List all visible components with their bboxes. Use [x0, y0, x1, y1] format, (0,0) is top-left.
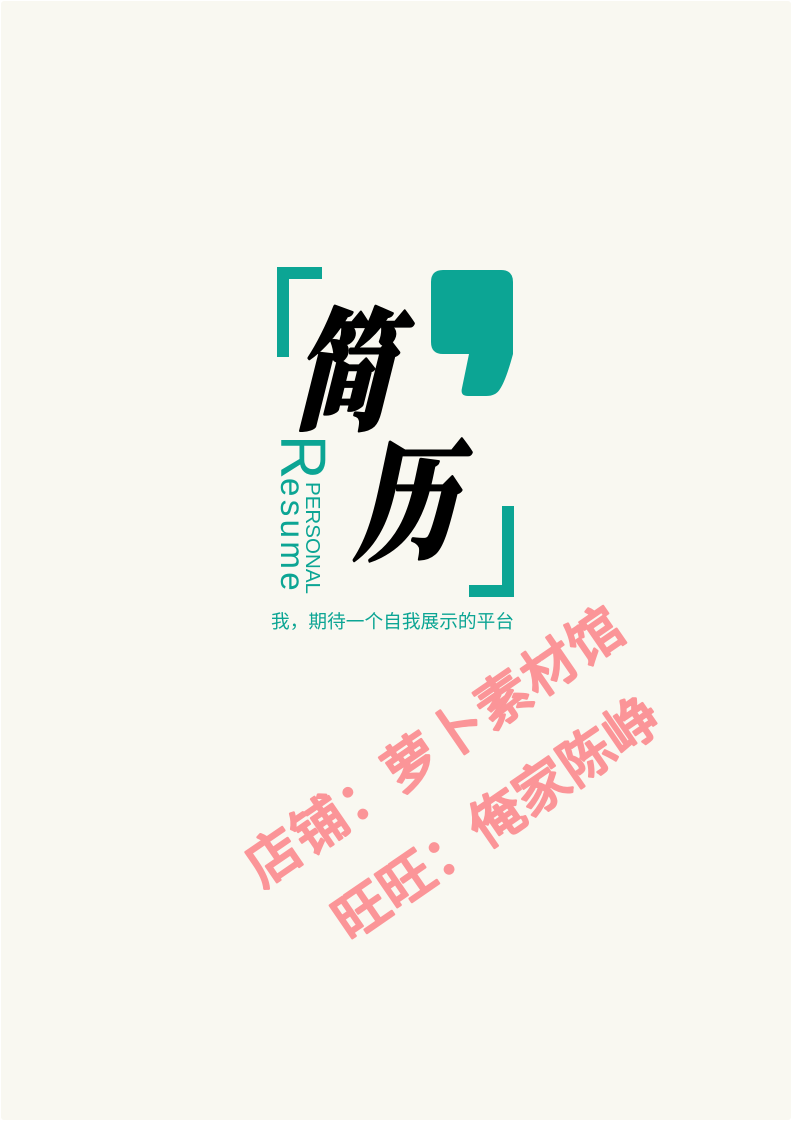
vertical english label: Resume: R [267, 435, 338, 479]
tagline: 我，期待一个自我展示的平台 [271, 611, 514, 632]
icon: top-left bracket [277, 267, 322, 357]
calligraphy title: jianli: 历 [346, 400, 485, 587]
vertical english label: Resume: esume [274, 478, 311, 594]
vertical english label: Resume [267, 435, 338, 594]
watermark: shop name: 店铺：萝卜素材馆 [226, 585, 637, 901]
vertical english label: PERSONAL: PERSONAL [301, 482, 323, 594]
watermark: wangwang contact: 旺旺：俺家陈峥 [314, 674, 674, 955]
calligraphy title: jianli [282, 268, 485, 587]
calligraphy title: jianli: 简 [282, 268, 430, 455]
icon: bottom-right bracket [469, 506, 514, 597]
icon: large quotation comma [431, 270, 513, 396]
